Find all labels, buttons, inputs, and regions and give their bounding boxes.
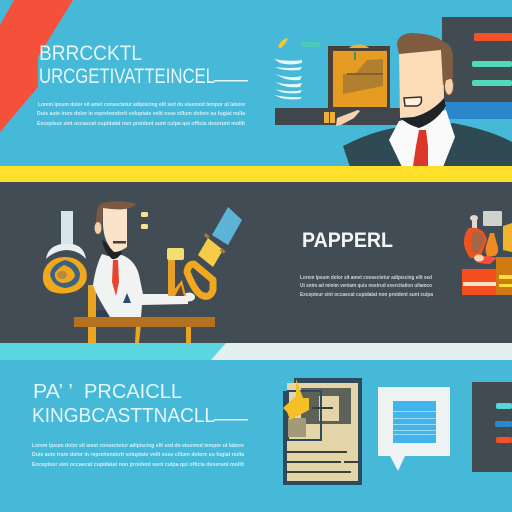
light band <box>0 343 512 360</box>
text block: bottom section body: Lorem ipsum dolor sit amet consectetur adipiscing elit sed do eiusmod tempor ut labore <box>32 443 244 449</box>
cyan band left <box>0 343 226 360</box>
heading underline <box>214 80 248 82</box>
heading line 1 continued: PRCAICLL <box>84 381 182 403</box>
icon: speech bubble <box>378 387 450 471</box>
teal bar <box>496 403 512 409</box>
pocket mark <box>123 293 131 303</box>
icon: stacked white lines <box>274 59 302 99</box>
icon: orange objects cluster <box>462 211 512 295</box>
tie <box>413 130 428 166</box>
teal dash <box>301 42 321 47</box>
mouth <box>404 97 422 106</box>
man: top portrait <box>343 33 512 167</box>
text block: top section body: Excepteur sint occaecat cupidatat non proident sunt culpa qui officia deserunt mollit <box>37 121 245 127</box>
ear <box>94 222 102 234</box>
text block: bottom section body: Excepteur sint occaecat cupidatat non proident sunt culpa qui officia deserunt mollit <box>32 462 244 468</box>
right dark panel <box>442 17 512 102</box>
face <box>103 207 127 252</box>
text block: top section body: Duis aute irure dolor in reprehenderit voluptate velit esse cillum dolore eu fugiat nulla <box>37 111 246 117</box>
hand <box>336 110 360 126</box>
text block: bottom section body <box>32 443 245 468</box>
heading: middle: PAPPERL <box>302 229 393 252</box>
heading line 2: KINGBCASTTNACLL <box>32 405 215 427</box>
icon: yellow crescent <box>278 38 288 48</box>
hand <box>183 292 195 302</box>
chair <box>88 285 96 343</box>
text block: middle body: Lorem ipsum dolor sit amet consectetur adipiscing elit sed <box>300 275 432 281</box>
red bar <box>496 437 512 443</box>
wedge inner <box>175 285 184 296</box>
beard <box>102 240 122 259</box>
text block: middle body: Ut enim ad minim veniam quis nostrud exercitation ullamco <box>300 283 433 289</box>
blue strip <box>446 102 512 119</box>
dark shelf <box>275 108 430 125</box>
hair <box>397 33 453 86</box>
body <box>93 254 188 317</box>
man: at desk <box>88 201 195 343</box>
tie <box>112 260 119 296</box>
red diagonal stripe <box>0 0 73 132</box>
icon: orange folder box <box>328 44 390 108</box>
teal bar 1 <box>472 61 512 67</box>
collar <box>389 110 455 167</box>
panel: bottom blue section <box>0 360 512 512</box>
hair <box>96 201 136 226</box>
ear <box>444 77 454 95</box>
bottom right dark panel <box>472 382 512 472</box>
post <box>168 260 175 296</box>
heading underline <box>214 419 248 420</box>
red bar <box>474 33 512 41</box>
icon: yellow tabs <box>324 112 335 123</box>
icon: yellow tool <box>167 207 242 296</box>
icon: flask and yellow ring <box>43 211 87 294</box>
top block <box>167 248 184 260</box>
heading: top section <box>39 42 215 88</box>
desk <box>74 317 215 343</box>
neck and beard <box>399 98 446 128</box>
yellow head <box>198 238 223 267</box>
text block: middle body: Excepteur sint occaecat cupidatat non proident sunt culpa <box>300 292 434 298</box>
text block: bottom section body: Duis aute irure dolor in reprehenderit voluptate velit esse cillum dolore eu fugiat nulla <box>32 452 245 458</box>
suit <box>343 123 512 167</box>
wedge <box>169 280 186 296</box>
face <box>399 46 444 118</box>
yellow band <box>0 166 512 182</box>
clamp ring <box>187 264 213 296</box>
text block: top section body <box>37 102 246 127</box>
blue handle <box>212 207 242 245</box>
chair back dark <box>96 310 111 317</box>
teal bar 2 <box>472 80 512 86</box>
mouth <box>113 241 126 244</box>
panel: top blue section <box>0 0 512 167</box>
icon: document <box>283 378 362 485</box>
heading: bottom section <box>32 381 215 427</box>
blue bar <box>495 421 512 427</box>
heading line 1: BRRCCKTL <box>39 42 142 65</box>
panel: middle dark section <box>0 182 512 343</box>
heading line 1: PA’ ’ <box>33 381 73 403</box>
text block: top section body: Lorem ipsum dolor sit amet consectetur adipiscing elit sed do eiusmod tempor ut labore <box>38 102 245 108</box>
thought dots <box>141 212 148 229</box>
text block: middle body <box>300 275 434 298</box>
heading line 2: URCGETIVATTEINCEL <box>39 65 215 88</box>
